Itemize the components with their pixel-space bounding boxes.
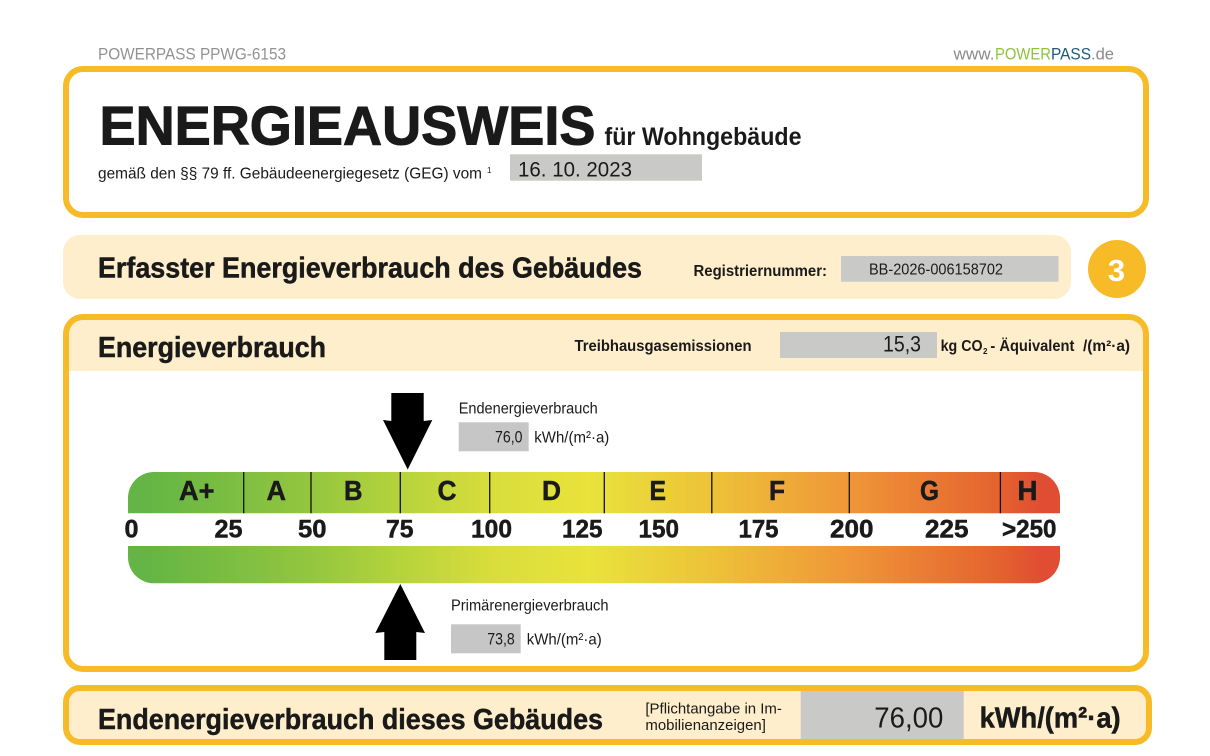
- class letters: A+: [179, 475, 214, 506]
- primary energy value field: 73,8: [487, 630, 515, 648]
- mandatory note: [645, 700, 782, 734]
- final energy value field: [459, 422, 529, 451]
- date field: 16. 10. 2023: [518, 159, 632, 182]
- scale numbers: >250: [1002, 516, 1056, 544]
- date field: [510, 154, 702, 182]
- scale numbers: 150: [638, 516, 679, 544]
- greenhouse gas value field: [780, 332, 937, 358]
- scale numbers: 225: [925, 516, 969, 544]
- primary energy value field: [451, 624, 521, 653]
- greenhouse gas unit: 2: [983, 347, 988, 356]
- heading: final energy of this building: Endenergieverbrauch dieses Gebäudes: [98, 704, 603, 736]
- greenhouse gas value field: 15,3: [883, 332, 921, 357]
- scale numbers: 50: [298, 516, 326, 544]
- class letters: F: [769, 475, 785, 506]
- final energy label: Endenergieverbrauch: [459, 400, 598, 417]
- legal basis text: gemäß den §§ 79 ff. Gebäudeenergiegesetz (GEG) vom: [98, 165, 482, 182]
- scale numbers: 75: [386, 516, 414, 544]
- class letters: E: [650, 475, 666, 506]
- scale numbers: 200: [830, 516, 874, 544]
- panel: title: [66, 69, 1146, 215]
- heading: recorded energy consumption: Erfasster Energieverbrauch des Gebäudes: [98, 252, 642, 284]
- scale numbers: [124, 516, 1056, 544]
- scale numbers: 125: [562, 516, 603, 544]
- class letters: A: [266, 475, 286, 506]
- header: website: POWER: [995, 44, 1051, 63]
- header: website: [952, 44, 1114, 63]
- chart: final energy scale bar: [128, 472, 1060, 513]
- chart: primary energy scale bar: [128, 546, 1060, 583]
- greenhouse gas unit: [941, 338, 1130, 356]
- summary unit: kWh/(m²·a): [980, 703, 1121, 735]
- summary value background: [801, 691, 964, 739]
- panel: energy consumption: [66, 317, 1146, 669]
- scale numbers: 0: [124, 516, 138, 544]
- mandatory note: [Pflichtangabe in Im-: [645, 700, 782, 717]
- class letters: D: [542, 475, 561, 506]
- class letters: H: [1018, 475, 1038, 506]
- heading: Energieausweis: ENERGIEAUSWEIS: [100, 94, 596, 156]
- subheading: für Wohngebäude: für Wohngebäude: [604, 123, 802, 151]
- mandatory note: mobilienanzeigen]: [645, 717, 766, 734]
- registration number label: Registriernummer:: [694, 263, 827, 280]
- arrow: final energy marker: [383, 393, 432, 470]
- registration number field: [841, 256, 1058, 282]
- scale numbers: 100: [471, 516, 512, 544]
- class letters: B: [344, 475, 362, 506]
- class letters: G: [920, 475, 939, 506]
- badge: page number 3: [1088, 240, 1146, 298]
- class letters: C: [438, 475, 457, 506]
- scale numbers: 175: [738, 516, 779, 544]
- panel: section banner: [63, 235, 1071, 299]
- header band: [66, 317, 1146, 371]
- final energy value field: 76,0: [495, 428, 522, 446]
- registration number field: BB-2026-006158702: [869, 261, 1003, 278]
- header: website: .de: [1091, 44, 1114, 63]
- header: website: www.: [952, 44, 994, 63]
- greenhouse gas unit: - Äquivalent: [990, 338, 1074, 355]
- scale numbers: 25: [214, 516, 243, 544]
- arrow: primary energy marker: [375, 584, 425, 660]
- header: website: PASS: [1051, 44, 1091, 63]
- primary energy unit: kWh/(m²·a): [527, 631, 602, 648]
- class letters: [179, 475, 1038, 506]
- final energy unit: kWh/(m²·a): [534, 429, 609, 446]
- badge: page number 3: 3: [1108, 253, 1125, 288]
- greenhouse gas label: Treibhausgasemissionen: [574, 338, 752, 355]
- panel: final energy summary: [66, 688, 1149, 742]
- heading: Energieverbrauch: Energieverbrauch: [98, 332, 326, 364]
- header: product code: POWERPASS PPWG-6153: [98, 44, 286, 63]
- greenhouse gas unit: kg CO: [941, 338, 983, 355]
- legal basis text: 1: [487, 166, 492, 175]
- summary value: 76,00: [874, 703, 943, 735]
- primary energy label: Primärenergieverbrauch: [451, 598, 608, 615]
- greenhouse gas unit: /(m²·a): [1083, 338, 1130, 355]
